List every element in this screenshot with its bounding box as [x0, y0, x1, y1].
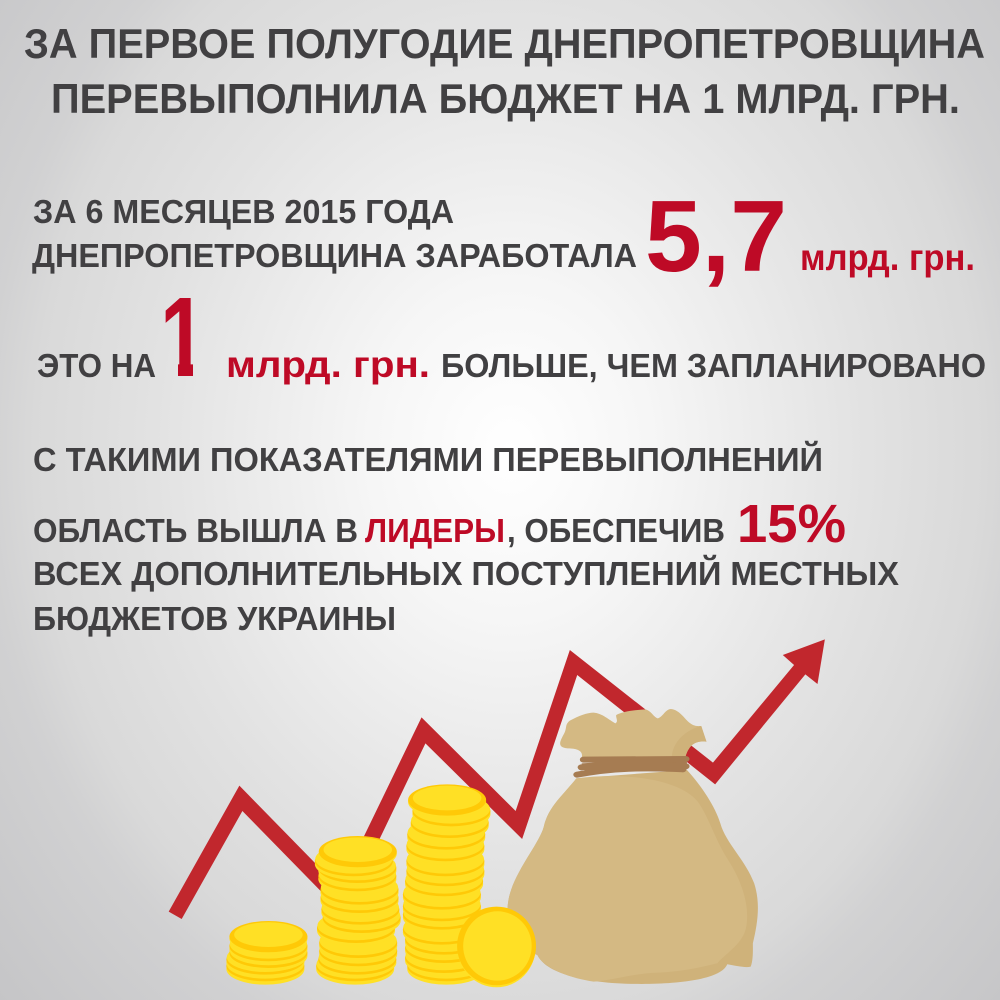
text block: leaders 15%: С ТАКИМИ ПОКАЗАТЕЛЯМИ ПЕРЕВЫПОЛНЕНИЙ — [33, 440, 823, 478]
icon: standing coin — [457, 907, 536, 987]
text block: 1 billion above plan: БОЛЬШЕ, ЧЕМ ЗАПЛАНИРОВАНО — [441, 347, 986, 384]
icon: coin stack small — [226, 921, 307, 985]
text block: 1 billion above plan — [38, 298, 985, 384]
icon: bag rope — [577, 759, 687, 775]
text block: 5,7 billion earned: 5,7 — [645, 181, 787, 293]
icon: coin stack medium — [315, 836, 401, 985]
text block: leaders 15%: , ОБЕСПЕЧИВ — [507, 512, 725, 549]
text block: leaders 15%: ОБЛАСТЬ ВЫШЛА В — [33, 512, 358, 549]
illustration: growth arrow, coins and money bag — [169, 639, 825, 987]
icon: coin stack large — [403, 784, 490, 985]
text block: 5,7 billion earned: млрд. грн. — [800, 237, 975, 278]
text block: 5,7 billion earned: ЗА 6 МЕСЯЦЕВ 2015 ГОДА — [33, 193, 454, 230]
text block: leaders 15%: 15% — [737, 494, 846, 554]
text block: leaders 15% — [33, 440, 899, 637]
text block: leaders 15%: ВСЕХ ДОПОЛНИТЕЛЬНЫХ ПОСТУПЛЕНИЙ МЕСТНЫХ — [33, 554, 899, 592]
icon: red growth arrow — [169, 639, 825, 919]
text block: 1 billion above plan: 1 — [160, 274, 206, 400]
text block: leaders 15%: ЛИДЕРЫ — [365, 512, 505, 549]
text block: 5,7 billion earned — [32, 181, 975, 293]
text block: 5,7 billion earned: ДНЕПРОПЕТРОВЩИНА ЗАРАБОТАЛА — [32, 237, 637, 274]
title — [24, 20, 985, 122]
text block: 1 billion above plan: млрд. грн. — [226, 344, 430, 385]
title: ПЕРЕВЫПОЛНИЛА БЮДЖЕТ НА 1 МЛРД. ГРН. — [51, 75, 960, 122]
text block: 1 billion above plan: ЭТО НА — [37, 347, 156, 384]
icon: money bag — [507, 709, 758, 984]
text block: leaders 15%: БЮДЖЕТОВ УКРАИНЫ — [33, 600, 396, 637]
